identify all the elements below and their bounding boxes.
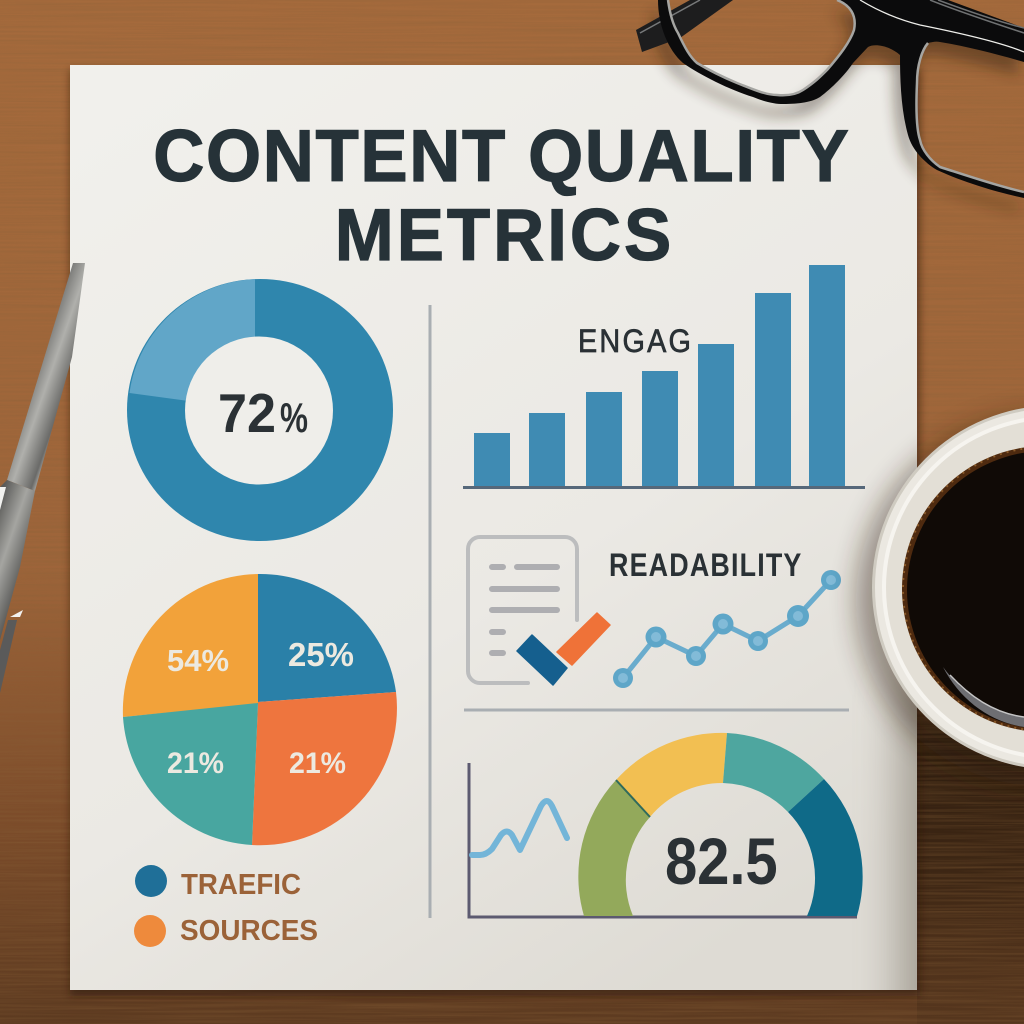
bar chart: engagement [463, 265, 865, 489]
label: readability: READABILITY [609, 548, 802, 584]
line chart: readability [613, 570, 841, 688]
divider [464, 708, 849, 712]
legend: traffic sources: TRAEFIC [181, 869, 301, 901]
pen [0, 263, 85, 693]
coffee cup [872, 406, 1024, 770]
donut chart: 72%: % [280, 394, 308, 441]
title: METRICS [335, 195, 671, 276]
small line chart [469, 763, 857, 917]
coffee cup shadow [856, 414, 1024, 786]
donut chart: 72%: 72 [218, 382, 276, 444]
paper shadow [70, 70, 920, 996]
legend: traffic sources: SOURCES [180, 915, 318, 947]
title: CONTENT QUALITY [153, 116, 849, 197]
pie chart: traffic sources: 21% [289, 747, 346, 780]
donut chart: 72% [127, 279, 393, 541]
eyeglasses [636, 0, 1024, 198]
gauge chart: 82.5: 82.5 [665, 826, 778, 899]
pie chart: traffic sources: 21% [167, 747, 224, 780]
icon: document with checkmark [468, 537, 610, 685]
pie chart: traffic sources: 54% [167, 643, 229, 678]
eyeglasses shadow [652, 13, 1018, 211]
title [153, 116, 849, 276]
pie chart: traffic sources [123, 574, 397, 845]
legend: traffic sources [134, 865, 318, 947]
gauge chart: 82.5 [578, 733, 863, 916]
pie chart: traffic sources: 25% [288, 636, 354, 673]
bar chart: engagement: ENGAG [578, 324, 691, 359]
divider [428, 305, 432, 918]
